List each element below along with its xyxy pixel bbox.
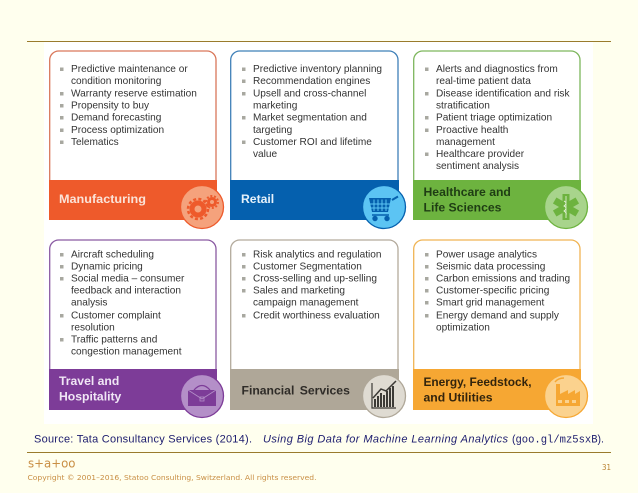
list: energy uses: Energy demand and supply (436, 310, 560, 322)
list: energy uses: Customer-specific pricing (436, 286, 549, 296)
list: manufacturing uses: Warranty reserve estimation (71, 88, 197, 100)
heading: Healthcare and Life Sciences: Healthcare and (424, 185, 511, 199)
list: healthcare uses (425, 64, 570, 172)
list: travel uses: Customer complaint (71, 310, 161, 322)
list: retail uses: Predictive inventory planning (253, 64, 382, 75)
footer logo: statoo: s+a+oo (28, 456, 76, 470)
icon: medical star (544, 186, 588, 228)
list: healthcare uses: sentiment analysis (436, 161, 519, 172)
list: retail uses: Market segmentation and (253, 112, 367, 124)
list: retail uses: Customer ROI and lifetime (253, 137, 372, 148)
list: healthcare uses: stratification (436, 100, 490, 112)
panel: Energy, Feedstock, and Utilities: and Utilities (424, 390, 493, 404)
heading: Retail: Retail (241, 192, 274, 206)
panel: Healthcare and Life Sciences: Life Sciences (424, 200, 502, 214)
list: financial uses: Customer Segmentation (253, 262, 362, 272)
panel: Retail (230, 51, 406, 228)
heading: Travel and Hospitality: Travel and (59, 374, 119, 388)
list: manufacturing uses: Demand forecasting (71, 112, 161, 124)
list: energy uses: Power usage analytics (436, 250, 537, 260)
list: healthcare uses: management (436, 137, 495, 148)
panel: Manufacturing (49, 51, 224, 228)
list: travel uses (60, 250, 185, 358)
list: energy uses: optimization (436, 322, 490, 334)
page number: 31 (602, 463, 611, 472)
list: retail uses: Recommendation engines (253, 76, 370, 87)
list: retail uses: value (253, 149, 278, 160)
source citation: (goo.gl/mz5sxB). (512, 434, 604, 446)
icon: shopping cart (362, 186, 406, 228)
source citation: Source: Tata Consultancy Services (2014). (34, 434, 252, 446)
list: travel uses: Traffic patterns and (71, 334, 157, 346)
list: retail uses: Upsell and cross-channel (253, 88, 366, 100)
list: retail uses: marketing (253, 100, 297, 112)
list: healthcare uses: Healthcare provider (436, 149, 525, 160)
list: healthcare uses: real-time patient data (436, 76, 531, 87)
list: healthcare uses: Patient triage optimization (436, 112, 552, 124)
list: manufacturing uses: Telematics (71, 137, 119, 148)
icon: factory (544, 374, 588, 418)
list: travel uses: Social media – consumer (71, 274, 185, 284)
list: travel uses: feedback and interaction (71, 286, 181, 296)
list: travel uses: analysis (71, 298, 107, 308)
heading: Financial Services: Financial Services (242, 384, 350, 398)
panel: Energy, Feedstock, and Utilities (413, 240, 588, 418)
list: manufacturing uses (60, 64, 197, 148)
icon: briefcase (180, 374, 224, 418)
list: manufacturing uses: condition monitoring (71, 76, 161, 87)
list: financial uses (242, 250, 381, 322)
list: travel uses: congestion management (71, 346, 182, 358)
source citation: Using Big Data for Machine Learning Analytics (263, 434, 508, 446)
list: healthcare uses: Disease identification and risk (436, 88, 570, 100)
list: energy uses: Seismic data processing (436, 262, 545, 272)
list: financial uses: Credit worthiness evaluation (253, 310, 380, 322)
list: energy uses (425, 250, 570, 334)
icon: bar chart (362, 374, 406, 418)
panel: Financial Services (230, 240, 406, 418)
list: retail uses (242, 64, 382, 160)
list: healthcare uses: Alerts and diagnostics from (436, 64, 558, 75)
list: travel uses: Aircraft scheduling (71, 250, 154, 260)
list: healthcare uses: Proactive health (436, 125, 508, 136)
list: manufacturing uses: Propensity to buy (71, 100, 150, 112)
list: manufacturing uses: Predictive maintenance or (71, 64, 188, 75)
source citation (34, 434, 604, 446)
list: financial uses: Cross-selling and up-selling (253, 274, 377, 284)
list: energy uses: Carbon emissions and trading (436, 274, 570, 284)
footer copyright: Copyright © 2001–2016, Statoo Consulting, Switzerland. All rights reserved. (28, 474, 316, 482)
icon: gears (180, 186, 224, 228)
heading: Manufacturing: Manufacturing (59, 192, 146, 206)
panel: Travel and Hospitality (49, 240, 224, 418)
list: travel uses: resolution (71, 322, 115, 334)
list: travel uses: Dynamic pricing (71, 262, 143, 272)
list: retail uses: targeting (253, 125, 292, 136)
list: financial uses: campaign management (253, 298, 359, 308)
heading: Energy, Feedstock, and Utilities: Energy, Feedstock, (424, 375, 532, 389)
list: manufacturing uses: Process optimization (71, 125, 164, 136)
list: financial uses: Risk analytics and regulation (253, 250, 381, 260)
list: energy uses: Smart grid management (436, 298, 544, 308)
panel: Healthcare and Life Sciences (413, 51, 588, 228)
panel: Travel and Hospitality: Hospitality (59, 390, 122, 404)
list: financial uses: Sales and marketing (253, 286, 345, 296)
